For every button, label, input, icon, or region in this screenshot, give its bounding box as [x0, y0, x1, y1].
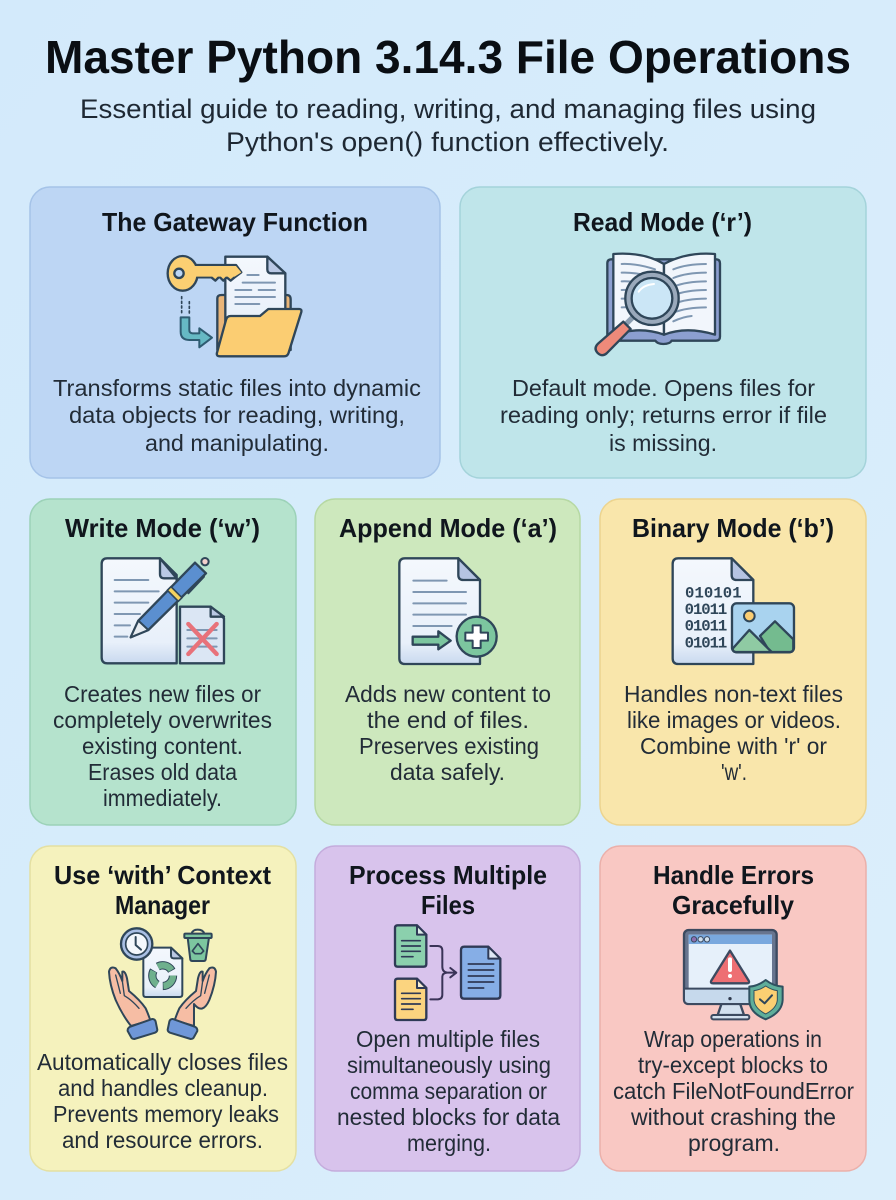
description: Process Multiple Files	[337, 1026, 560, 1156]
description: Handle Errors Gracefully: without crashing the	[630, 1104, 836, 1130]
description: Write Mode: existing content.	[82, 733, 243, 759]
description: Append Mode: the end of files.	[367, 707, 529, 733]
heading: Use with Context Manager: Manager	[115, 890, 210, 920]
description: Write Mode: Erases old data	[88, 759, 237, 785]
description: Append Mode: Preserves existing	[359, 733, 539, 759]
panel: Binary Mode	[600, 499, 866, 825]
description: Read Mode: reading only; returns error if file	[500, 402, 827, 428]
icon: binary document and image: 01011	[685, 601, 727, 619]
panel: Handle Errors Gracefully	[600, 846, 866, 1171]
icon: document with append arrow and plus	[399, 558, 497, 664]
description: Read Mode	[500, 375, 827, 456]
description: Binary Mode: like images or videos.	[627, 707, 841, 733]
panel: Use with Context Manager	[30, 846, 296, 1171]
icon: monitor with warning triangle and shield	[684, 930, 783, 1019]
description: Use with Context Manager	[37, 1049, 288, 1153]
icon: binary document and image: 010101	[685, 584, 742, 602]
heading: Handle Errors Gracefully	[653, 860, 814, 920]
icon: binary document and image	[673, 558, 794, 664]
description: Use with Context Manager: and resource errors.	[62, 1127, 263, 1153]
heading: Use with Context Manager	[54, 860, 271, 920]
heading: Write Mode: Write Mode (‘w’)	[65, 513, 260, 543]
panel: Write Mode	[30, 499, 296, 825]
description: Read Mode: Default mode. Opens files for	[512, 375, 815, 401]
description: Handle Errors Gracefully: program.	[688, 1130, 780, 1156]
subtitle	[80, 94, 816, 157]
description: The Gateway Function: and manipulating.	[145, 430, 329, 456]
description: Use with Context Manager: Prevents memory leaks	[53, 1101, 279, 1127]
description: Write Mode: completely overwrites	[53, 707, 272, 733]
description: Process Multiple Files: merging.	[407, 1130, 491, 1156]
heading: Process Multiple Files: Files	[421, 890, 475, 920]
description: Append Mode: Adds new content to	[345, 681, 551, 707]
description: Binary Mode: 'w'.	[721, 759, 747, 785]
description: Handle Errors Gracefully: catch FileNotFoundError	[613, 1078, 854, 1104]
icon: binary document and image: 01011	[685, 618, 727, 636]
heading: Use with Context Manager: Use ‘with’ Context	[54, 860, 271, 890]
description: Append Mode: data safely.	[390, 759, 505, 785]
icon: open book with magnifying glass	[596, 254, 720, 355]
icon: binary document and image: 01011	[685, 634, 727, 652]
description: Write Mode: Creates new files or	[64, 681, 261, 707]
description: Process Multiple Files: simultaneously using	[347, 1052, 551, 1078]
title: Master Python 3.14.3 File Operations	[45, 31, 851, 83]
description: The Gateway Function: data objects for reading, writing,	[69, 402, 405, 428]
panel: Read Mode	[460, 187, 866, 478]
description: Process Multiple Files: nested blocks for data	[337, 1104, 560, 1130]
description: Binary Mode: Combine with 'r' or	[640, 733, 827, 759]
icon: hands, recycling page, clock and bin	[109, 928, 216, 1039]
heading: Handle Errors Gracefully: Handle Errors	[653, 860, 814, 890]
heading: Append Mode: Append Mode (‘a’)	[339, 513, 557, 543]
description: Write Mode	[53, 681, 272, 811]
heading: Process Multiple Files: Process Multiple	[349, 860, 547, 890]
heading: Binary Mode: Binary Mode (‘b’)	[632, 513, 834, 543]
description: Process Multiple Files: Open multiple files	[356, 1026, 540, 1052]
description: Use with Context Manager: Automatically closes files	[37, 1049, 288, 1075]
description: Handle Errors Gracefully: Wrap operations in	[644, 1026, 822, 1052]
description: Binary Mode	[624, 681, 843, 785]
description: Binary Mode: Handles non-text files	[624, 681, 843, 707]
description: Append Mode	[345, 681, 551, 785]
description: Read Mode: is missing.	[609, 430, 717, 456]
subtitle: Python's open() function effectively.	[226, 127, 669, 157]
description: Write Mode: immediately.	[103, 785, 222, 811]
description: Handle Errors Gracefully	[613, 1026, 854, 1156]
panel: Append Mode	[315, 499, 580, 825]
heading: Process Multiple Files	[349, 860, 547, 920]
icon: two files merging into one	[395, 925, 500, 1020]
icon: key, document and folder	[168, 256, 301, 356]
panel: Process Multiple Files	[315, 846, 580, 1171]
panel: The Gateway Function	[30, 187, 440, 478]
description: Process Multiple Files: comma separation or	[350, 1078, 547, 1104]
heading: The Gateway Function: The Gateway Function	[102, 207, 368, 237]
description: Handle Errors Gracefully: try-except blocks to	[638, 1052, 828, 1078]
heading: Handle Errors Gracefully: Gracefully	[672, 890, 795, 920]
description: The Gateway Function: Transforms static files into dynamic	[53, 375, 421, 401]
subtitle: Essential guide to reading, writing, and managing files using	[80, 94, 816, 124]
description: The Gateway Function	[53, 375, 421, 456]
heading: Read Mode: Read Mode (‘r’)	[573, 207, 752, 237]
description: Use with Context Manager: and handles cleanup.	[58, 1075, 268, 1101]
icon: document, pen and crossed-out page	[102, 558, 224, 663]
